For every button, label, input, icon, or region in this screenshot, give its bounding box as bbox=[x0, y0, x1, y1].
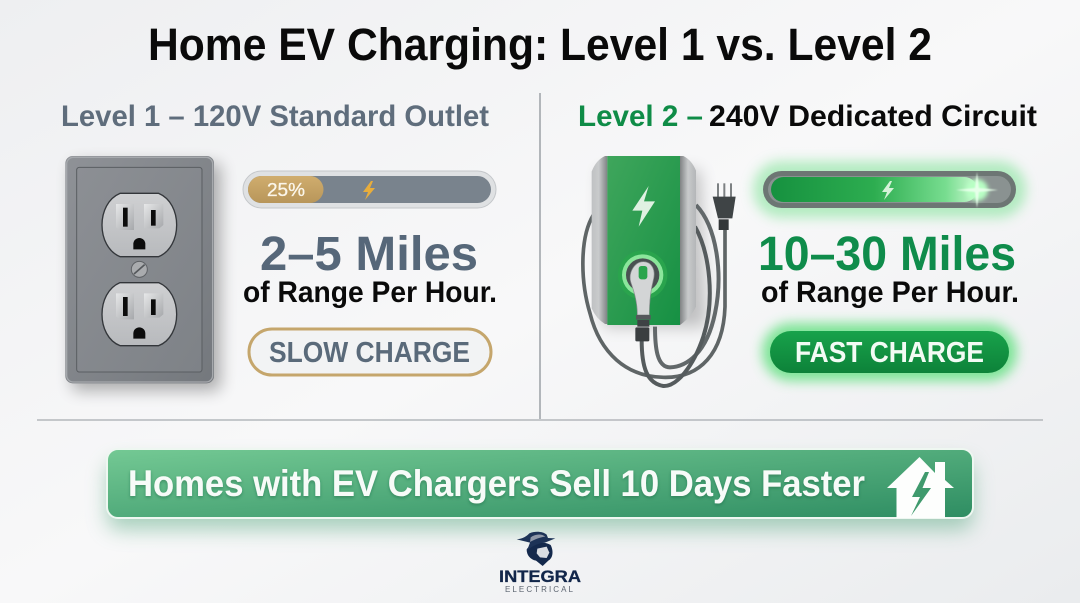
wordmark: INTEGRA bbox=[499, 567, 581, 586]
banner: homes sell faster bbox=[107, 449, 973, 530]
heading: 240V dedicated circuit: 240V Dedicated Circuit bbox=[709, 100, 1037, 133]
heading: level 1: Level 1 – 120V Standard Outlet bbox=[61, 100, 489, 133]
stat: 10–30 miles: 10–30 Miles bbox=[758, 228, 1016, 281]
badge: slow charge bbox=[249, 329, 491, 375]
panel: level 1 bbox=[61, 100, 497, 391]
title: Home EV Charging: Level 1 vs. Level 2 bbox=[148, 19, 932, 70]
text: of range per hour: of Range Per Hour. bbox=[761, 276, 1019, 309]
progress bar: 25% bbox=[243, 171, 496, 208]
progress bar: high charge bbox=[753, 161, 1026, 218]
icon: wall charger bbox=[583, 156, 736, 386]
heading: level 2: Level 2 – bbox=[578, 100, 703, 133]
text: of range per hour: of Range Per Hour. bbox=[243, 276, 497, 309]
logo: integra electrical bbox=[499, 532, 581, 594]
wordmark subtitle: ELECTRICAL bbox=[505, 585, 574, 594]
panel: level 2 bbox=[578, 100, 1037, 386]
progress bar: 25%: 25% bbox=[267, 180, 305, 200]
stat: 2–5 miles: 2–5 Miles bbox=[260, 228, 478, 281]
icon: wall outlet bbox=[65, 156, 221, 391]
icon: logo head bbox=[517, 532, 555, 566]
badge: fast charge bbox=[762, 323, 1017, 381]
badge: fast charge: FAST CHARGE bbox=[795, 337, 984, 369]
badge: slow charge: SLOW CHARGE bbox=[269, 337, 470, 369]
banner text: Homes with EV Chargers Sell 10 Days Faster bbox=[128, 463, 865, 504]
icon: house with bolt bbox=[887, 457, 954, 518]
